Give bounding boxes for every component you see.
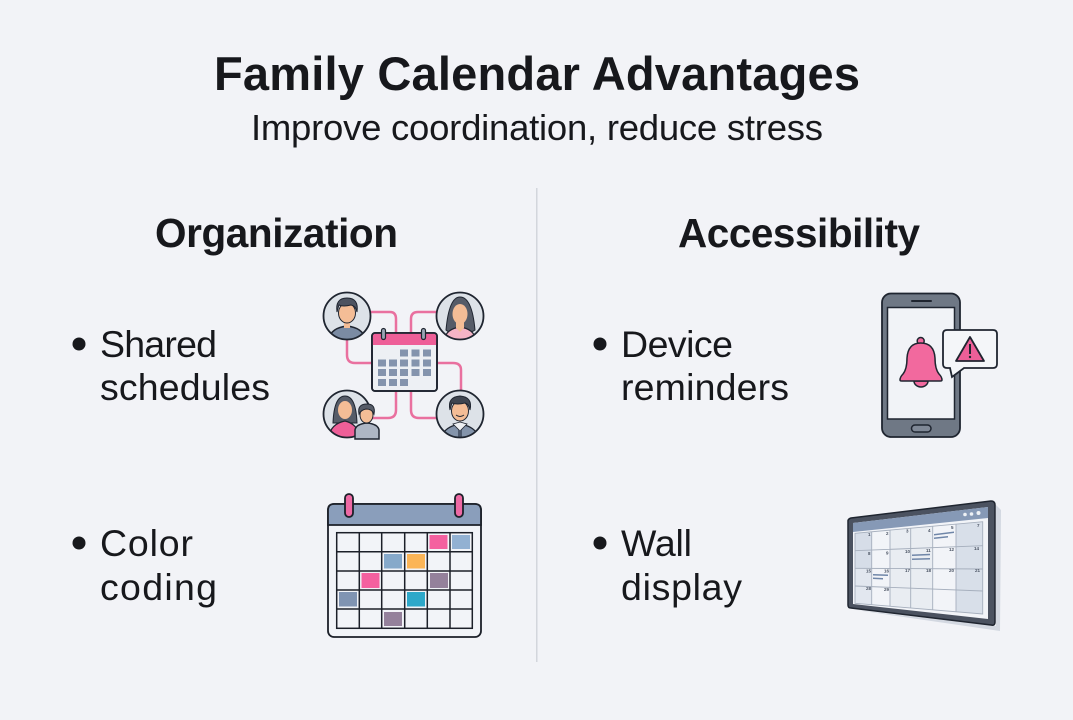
- alert bubble: [943, 330, 997, 377]
- day numbers: 12: [949, 547, 955, 552]
- bullet: device reminders: reminders: [621, 366, 789, 408]
- phone screen: [888, 308, 954, 419]
- day numbers: 9: [886, 550, 889, 556]
- day numbers: 18: [926, 568, 932, 573]
- day numbers: 29: [884, 587, 890, 592]
- person: woman: [436, 292, 484, 340]
- icon: shared family calendar: [324, 292, 484, 440]
- bullet: color coding: coding: [100, 566, 217, 608]
- day numbers: 16: [884, 568, 890, 574]
- day numbers: 4: [928, 528, 931, 533]
- calendar header: [328, 504, 481, 525]
- person: parent and child: [324, 390, 379, 439]
- day numbers: 17: [905, 568, 911, 573]
- day numbers: 11: [926, 548, 931, 553]
- bullet: wall display: display: [621, 566, 742, 608]
- connectors: [347, 312, 461, 418]
- day numbers: 21: [975, 568, 981, 573]
- divider: [536, 188, 538, 662]
- icon: wall display: [848, 501, 1001, 631]
- screen: [853, 507, 988, 619]
- shaded columns: [855, 532, 872, 551]
- person: man: [324, 292, 370, 340]
- bullet: color coding: Color: [100, 522, 193, 564]
- day numbers: 5: [951, 525, 954, 530]
- colored day cells: [339, 535, 470, 626]
- title: Family Calendar Advantages: [214, 47, 860, 100]
- calendar rings: [345, 494, 353, 517]
- icon: color coded calendar: [328, 494, 481, 637]
- icon: phone with alert: [882, 294, 997, 437]
- day numbers: 7: [977, 523, 980, 528]
- day numbers: 15: [866, 568, 872, 574]
- bullet: wall display: [594, 522, 742, 608]
- bullet: shared schedules: Shared: [100, 323, 217, 365]
- day numbers: 3: [906, 528, 909, 534]
- bullet: device reminders: Device: [621, 323, 733, 365]
- central calendar: [372, 328, 437, 391]
- shadow: [856, 505, 1001, 631]
- day numbers: 14: [974, 546, 980, 551]
- frame: [848, 501, 995, 625]
- day numbers: 8: [868, 551, 871, 556]
- calendar grid: [855, 522, 983, 614]
- heading: organization: Organization: [155, 210, 398, 256]
- day numbers: 10: [905, 549, 911, 554]
- day numbers: 28: [866, 586, 872, 591]
- bullet: wall display: Wall: [621, 522, 692, 564]
- phone body: [882, 294, 960, 437]
- day numbers: 1: [868, 532, 871, 537]
- bullet: color coding: [72, 522, 217, 608]
- day numbers: 2: [886, 531, 889, 536]
- event bars: [873, 532, 954, 580]
- bullet: device reminders: [594, 323, 789, 408]
- bell: [900, 338, 942, 387]
- panel: accessibility: [594, 210, 1001, 631]
- day numbers: 20: [949, 568, 955, 573]
- calendar grid: [337, 533, 472, 628]
- screen header: [853, 507, 988, 532]
- person: man with tie: [436, 390, 484, 440]
- bullet: shared schedules: schedules: [100, 366, 270, 408]
- warning triangle: [956, 337, 984, 361]
- day numbers: [866, 523, 981, 592]
- subtitle: Improve coordination, reduce stress: [251, 107, 823, 148]
- speaker and home button: [911, 300, 932, 302]
- heading: accessibility: Accessibility: [678, 210, 920, 256]
- panel: organization: [72, 210, 484, 637]
- bullet: shared schedules: [72, 323, 270, 408]
